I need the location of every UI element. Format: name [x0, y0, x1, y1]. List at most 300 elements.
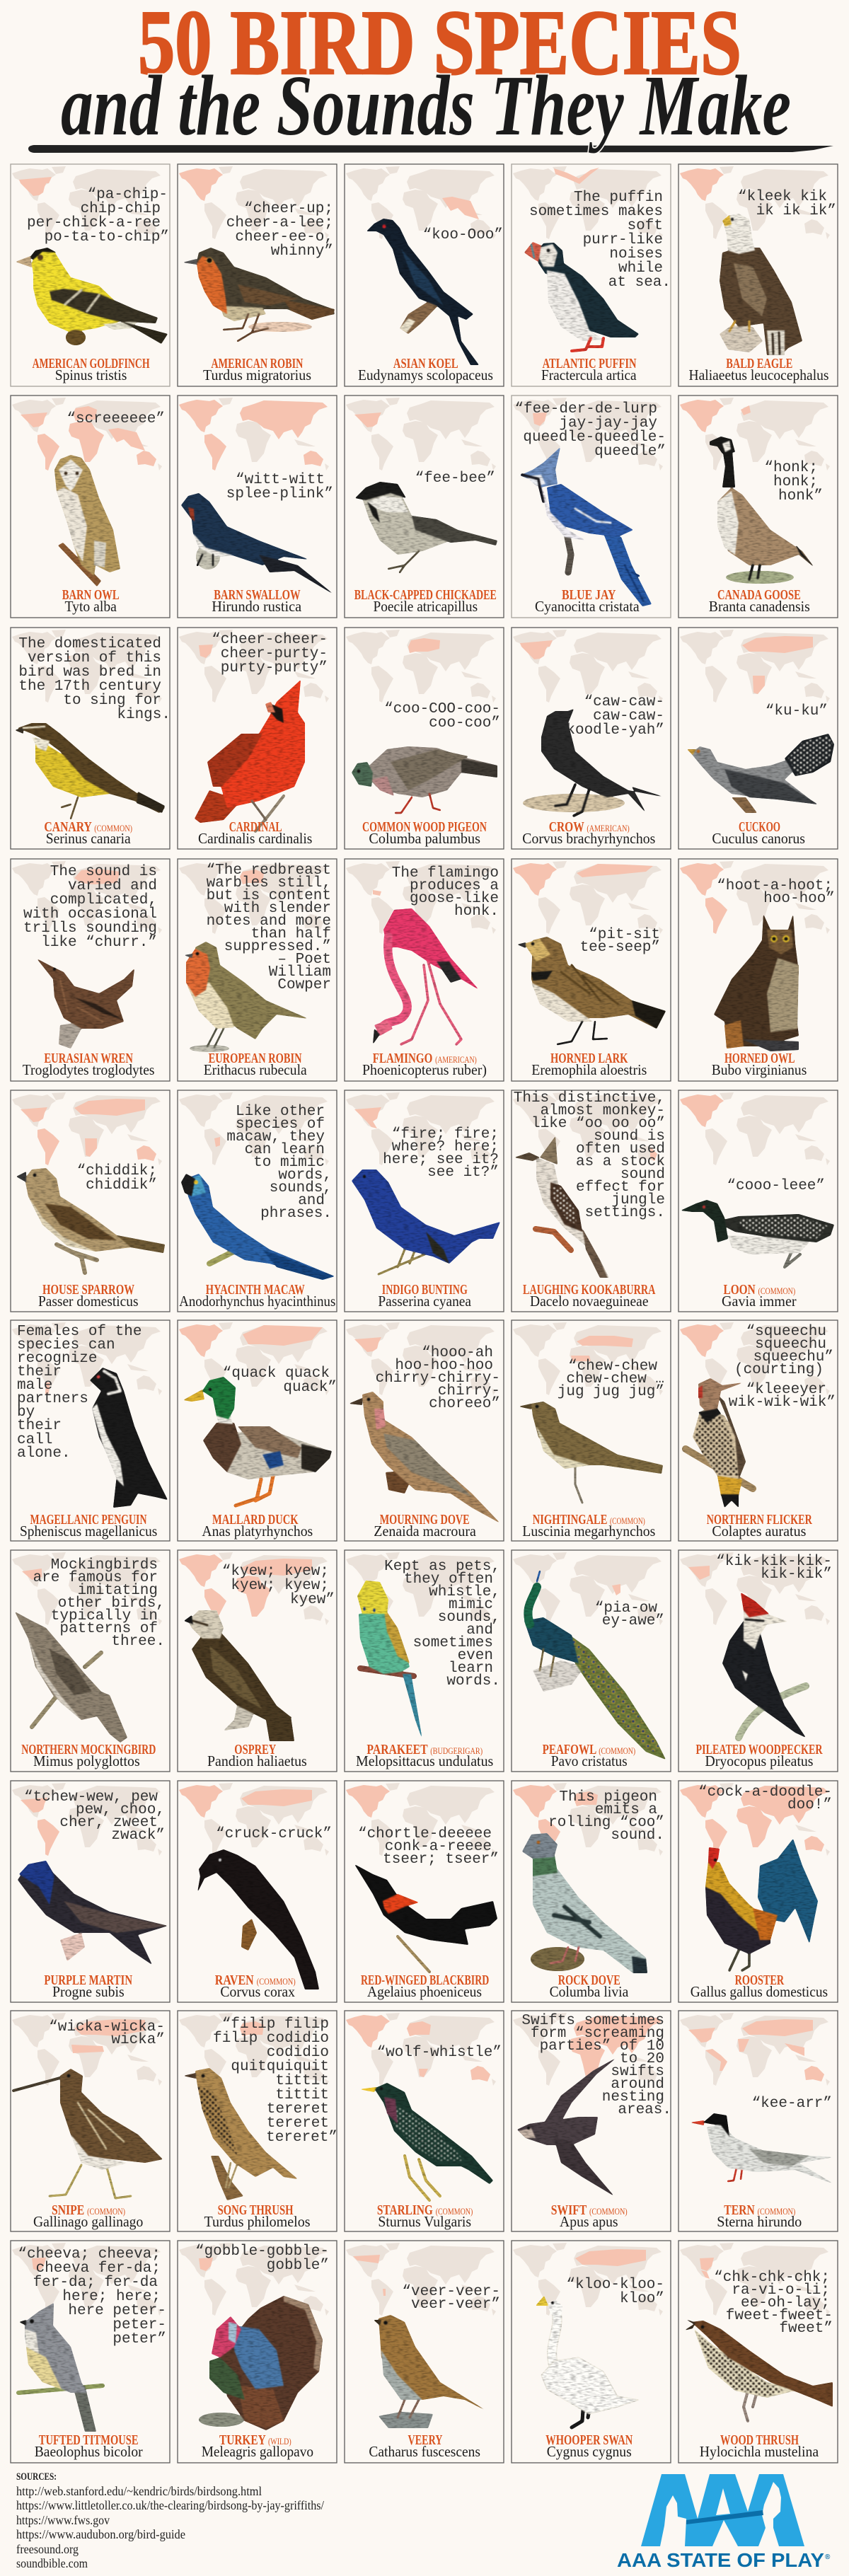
scientific name: Pavo cristatus [551, 1752, 628, 1769]
panel: Northern Mockingbird [11, 1550, 170, 1772]
quote: “chiddik; [77, 1163, 157, 1179]
quote: Mockingbirds [51, 1557, 158, 1573]
range map [179, 861, 329, 934]
bird illustration [517, 2057, 617, 2196]
name: MOURNING DOVE [380, 1512, 470, 1527]
bird illustration [366, 219, 479, 365]
quote: sound [620, 1167, 665, 1183]
range map [513, 1783, 663, 1856]
quote: imitating [78, 1583, 158, 1599]
range map [513, 861, 663, 934]
range map [12, 398, 162, 470]
range map [680, 398, 830, 470]
range map [179, 1092, 329, 1165]
quote: suppressed.” [224, 939, 331, 955]
panel: Horned Lark [512, 859, 671, 1081]
range map [346, 2013, 496, 2086]
quote: “squeechu [746, 1324, 826, 1340]
quote: kyew; kyew; [231, 1578, 329, 1594]
sources: https://www.audubon.org/bird-guide [16, 2527, 185, 2541]
quote: “honk; [764, 460, 818, 476]
quote: ey-awe” [602, 1613, 664, 1629]
panel: Horned Owl [678, 859, 838, 1081]
bird illustration [522, 1833, 647, 1973]
panel: Mourning Dove [345, 1320, 504, 1541]
quote: ee-oh-lay; [741, 2295, 830, 2311]
quote: “chk-chk-chk; [714, 2270, 830, 2286]
bird illustration [183, 1377, 332, 1506]
range map [179, 1322, 329, 1395]
panel: Northern Flicker [678, 1320, 838, 1541]
quote: wik-wik-wik” [729, 1394, 836, 1411]
panel: Nightingale [512, 1320, 671, 1541]
name: SNIPE (COMMON) [52, 2202, 125, 2218]
panel: Tern [678, 2011, 838, 2231]
quote: here; see it? [383, 1152, 499, 1168]
quote: “kleeeyer [746, 1382, 826, 1398]
name: TURKEY (WILD) [219, 2432, 291, 2448]
panel: Peafowl [512, 1550, 671, 1772]
quote: tereret [267, 2115, 329, 2132]
quote: “cruck-cruck” [216, 1826, 332, 1842]
quote: peter- [112, 2317, 166, 2333]
quote: sometimes makes [529, 204, 663, 220]
range map [179, 2243, 329, 2316]
panel: Crow [512, 628, 671, 849]
quote: call [17, 1432, 52, 1448]
name: RAVEN (COMMON) [215, 1973, 296, 1988]
quote: “fee-der-de-lurp [514, 401, 657, 417]
scientific name: Apus apus [560, 2213, 618, 2230]
bird illustration [54, 455, 120, 587]
name: TERN (COMMON) [724, 2202, 795, 2218]
name: COMMON WOOD PIGEON [362, 819, 487, 835]
panel: American Goldfinch [11, 164, 170, 386]
quote: “kyew; kyew; [222, 1564, 329, 1580]
quote: Like other [236, 1104, 325, 1120]
bird illustration [374, 2315, 490, 2428]
quote: gobble” [267, 2258, 329, 2274]
quote: “veer-veer- [402, 2284, 500, 2300]
quote: than half [251, 926, 331, 942]
scientific name: Agelaius phoeniceus [367, 1983, 482, 2000]
quote: their [17, 1364, 62, 1380]
quote: with slender [224, 901, 331, 917]
quote: whistle, [429, 1584, 500, 1600]
range map [680, 166, 830, 239]
quote: kings. [117, 707, 171, 723]
quote: “pia-ow [595, 1600, 657, 1617]
scientific name: Pandion haliaetus [207, 1752, 307, 1769]
scientific name: Anas platyrhynchos [202, 1523, 313, 1540]
bird illustration [536, 2296, 639, 2427]
quote: kyew” [290, 1592, 335, 1608]
scientific name: Anodorhynchus hyacinthinus [179, 1293, 335, 1310]
quote: ik ik ik” [756, 203, 836, 219]
name: HOUSE SPARROW [42, 1282, 134, 1298]
name: SONG THRUSH [218, 2202, 294, 2218]
quote: po-ta-to-chip” [45, 229, 169, 246]
scientific name: Poecile atricapillus [374, 598, 478, 615]
quote: notes and more [207, 913, 331, 930]
panel: Parakeet [345, 1550, 504, 1772]
quote: species of [236, 1116, 325, 1133]
quote: “fee-bee” [415, 470, 495, 487]
quote: “cheer-cheer- [212, 632, 328, 648]
name: LAUGHING KOOKABURRA [523, 1282, 656, 1298]
bird illustration [355, 482, 497, 572]
scientific name: Eremophila aloestris [531, 1061, 647, 1078]
panel: Veery [345, 2241, 504, 2463]
range map [12, 1322, 162, 1395]
panel: European Robin [178, 859, 337, 1081]
range map [179, 398, 329, 470]
quote: soft [628, 218, 663, 234]
panel: Eurasian Wren [11, 859, 170, 1081]
quote: jay-jay-jay [559, 415, 657, 432]
bird illustration [684, 2318, 833, 2421]
bird illustration [349, 1392, 500, 1523]
quote: “wicka-wicka- [49, 2019, 165, 2035]
quote: cheeva fer-da; [36, 2260, 161, 2277]
quote: here peter- [68, 2303, 166, 2319]
quote: varied and [68, 878, 157, 894]
quote: “ku-ku” [766, 703, 828, 720]
name: ROOSTER [735, 1973, 785, 1988]
quote: by [17, 1404, 35, 1421]
panel: House Sparrow [11, 1090, 170, 1312]
panel: Bald Eagle [678, 164, 838, 386]
quote: fer-da; fer-da [33, 2275, 158, 2291]
name: CROW (AMERICAN) [549, 819, 630, 835]
range map [346, 1552, 496, 1625]
quote: purty-purty” [221, 660, 328, 676]
quote: splee-plink” [226, 486, 333, 502]
quote: around [611, 2077, 664, 2093]
panel: Turkey [178, 2241, 337, 2463]
panel: Snipe [11, 2011, 170, 2231]
panel: Barn Owl [11, 395, 170, 618]
scientific name: Bubo virginianus [712, 1061, 807, 1078]
bird illustration [524, 242, 639, 351]
quote: with occasional [23, 906, 157, 923]
panel: Pileated Woodpecker [678, 1550, 838, 1772]
scientific name: Catharus fuscescens [369, 2443, 480, 2460]
panel: Rock Dove [512, 1781, 671, 2002]
range map [179, 2013, 329, 2086]
quote: zwack” [111, 1827, 165, 1844]
scientific name: Corvus corax [220, 1983, 295, 2000]
bird illustration [183, 2068, 298, 2200]
quote: quitquiquit [231, 2059, 329, 2075]
quote: “hooo-ah [422, 1345, 493, 1361]
range map [12, 861, 162, 934]
quote: “kleek kik [738, 189, 827, 205]
bird illustration [181, 1174, 335, 1280]
panel: Hyacinth Macaw [178, 1090, 337, 1312]
panel: Indigo Bunting [345, 1090, 504, 1312]
scientific name: Mimus polyglottos [33, 1752, 140, 1769]
name: PARAKEET (BUDGERIGAR) [366, 1742, 483, 1757]
quote: The puffin [574, 190, 663, 206]
name: HYACINTH MACAW [206, 1282, 305, 1298]
quote: effect for [576, 1179, 665, 1196]
scientific name: Erithacus rubecula [204, 1061, 307, 1078]
scientific name: Passer domesticus [38, 1293, 139, 1310]
name: EUROPEAN ROBIN [209, 1051, 302, 1066]
quote: and [298, 1193, 325, 1209]
bird illustration [15, 1612, 127, 1743]
bird illustration [90, 1368, 168, 1508]
quote: parties” of 10 [540, 2038, 664, 2055]
quote: “wolf-whistle” [377, 2045, 502, 2061]
name: MAGELLANIC PENGUIN [30, 1512, 147, 1527]
scientific name: Baeolophus bicolor [35, 2443, 143, 2460]
sources: https://www.littletoller.co.uk/the-clearing/birdsong-by-jay-griffiths/ [16, 2498, 324, 2512]
quote: chiddik” [86, 1177, 157, 1194]
quote: while [618, 260, 663, 277]
name: HORNED LARK [550, 1051, 628, 1066]
quote: The domesticated [18, 636, 161, 652]
quote: “pit-sit [589, 927, 660, 943]
range map [346, 2243, 496, 2316]
bird illustration [524, 1571, 666, 1760]
scientific name: Branta canadensis [709, 598, 810, 615]
quote: where? here; [392, 1139, 499, 1155]
quote: sometimes [413, 1635, 493, 1651]
panel: Loon [678, 1090, 838, 1312]
bird illustration [514, 1136, 609, 1278]
panel: Black-capped Chickadee [345, 395, 504, 618]
panel: Rooster [678, 1781, 838, 2002]
logo: AAA State of Play: ® [825, 2553, 831, 2561]
quote: like “oo oo oo” [531, 1116, 665, 1132]
bird illustration [523, 709, 666, 816]
quote: This distinctive, [514, 1090, 665, 1107]
range map [513, 1322, 663, 1395]
scientific name: Colaptes auratus [712, 1523, 806, 1540]
quote: “caw-caw- [584, 694, 664, 710]
quote: trills sounding [23, 920, 157, 937]
quote: “cheer-up; [244, 201, 333, 217]
quote: per-chick-a-ree [27, 215, 161, 231]
scientific name: Turdus philomelos [204, 2213, 310, 2230]
bird illustration [16, 1168, 165, 1273]
name: AMERICAN GOLDFINCH [33, 356, 150, 371]
scientific name: Melopsittacus undulatus [356, 1752, 493, 1769]
quote: typically in [51, 1608, 158, 1624]
quote: “witt-witt [236, 472, 325, 488]
name: BALD EAGLE [726, 356, 792, 371]
name: FLAMINGO (AMERICAN) [373, 1051, 477, 1066]
quote: honk” [778, 488, 823, 504]
quote: chirry- [438, 1383, 500, 1399]
bird illustration [199, 2296, 323, 2430]
name: ASIAN KOEL [393, 356, 458, 371]
panel: Barn Swallow [178, 395, 337, 618]
range map [12, 2243, 162, 2316]
bird illustration [354, 1864, 497, 1972]
sources: freesound.org [16, 2542, 79, 2556]
range map [12, 166, 162, 239]
quote: hoo-hoo-hoo [395, 1358, 493, 1374]
quote: often used [576, 1141, 665, 1157]
scientific name: Spheniscus magellanicus [20, 1523, 157, 1540]
name: BLUE JAY [562, 587, 616, 603]
name: WOOD THRUSH [720, 2432, 799, 2448]
quote: complicated, [50, 892, 157, 908]
name: NORTHERN MOCKINGBIRD [21, 1742, 156, 1757]
name: VEERY [408, 2432, 443, 2448]
scientific name: Gallus gallus domesticus [691, 1983, 828, 2000]
name: EURASIAN WREN [44, 1051, 133, 1066]
quote: “The redbreast [207, 862, 331, 879]
quote: the 17th century [18, 678, 161, 695]
quote: other birds, [58, 1595, 165, 1612]
quote: veer-veer” [411, 2297, 500, 2313]
scientific name: Passerina cyanea [378, 1293, 472, 1310]
quote: rolling “coo” [548, 1815, 664, 1831]
scientific name: Spinus tristis [55, 366, 127, 383]
panel: Asian Koel [345, 164, 504, 386]
bird illustration [519, 1402, 663, 1503]
name: SWIFT (COMMON) [551, 2202, 628, 2218]
range map [179, 1552, 329, 1625]
quote: “screeeeee” [67, 411, 165, 427]
quote: Cowper [277, 977, 331, 993]
scientific name: Cardinalis cardinalis [198, 830, 312, 847]
range map [346, 1783, 496, 1856]
sources: http://web.stanford.edu/~kendric/birds/birdsong.html [16, 2484, 262, 2498]
bird illustration [181, 493, 335, 595]
bird illustration [37, 959, 134, 1049]
quote: William [269, 964, 331, 981]
bird illustration [373, 908, 479, 1044]
scientific name: Troglodytes troglodytes [23, 1061, 154, 1078]
scientific name: Sterna hirundo [717, 2213, 802, 2230]
quote: pew, choo, [76, 1802, 165, 1818]
quote: recognize [17, 1351, 97, 1367]
bird illustration [184, 1610, 304, 1741]
quote: here; here; [62, 2289, 161, 2305]
range map [680, 1092, 830, 1165]
quote: learn [449, 1660, 493, 1677]
name: ROCK DOVE [558, 1973, 620, 1988]
range map [513, 166, 663, 239]
range map [680, 861, 830, 934]
quote: “kik-kik-kik- [716, 1554, 832, 1570]
bird illustration [195, 680, 305, 831]
quote: tee-seep” [580, 940, 660, 956]
sources: https://www.fws.gov [16, 2513, 110, 2527]
panel: Tufted Titmouse [11, 2241, 170, 2463]
range map [346, 1322, 496, 1395]
quote: cheer-ee-o, [235, 229, 333, 246]
quote: codidio [267, 2045, 329, 2061]
panel: Osprey [178, 1550, 337, 1772]
quote: “gobble-gobble- [195, 2243, 329, 2260]
quote: are famous for [33, 1570, 158, 1586]
name: ATLANTIC PUFFIN [543, 356, 637, 371]
quote: they often [404, 1571, 493, 1588]
range map [513, 2243, 663, 2316]
name: MALLARD DUCK [212, 1512, 299, 1527]
range map [179, 1783, 329, 1856]
range map [680, 2013, 830, 2086]
quote: see it?” [427, 1165, 499, 1181]
scientific name: Dryocopus pileatus [705, 1752, 814, 1769]
scientific name: Zenaida macroura [374, 1523, 477, 1540]
quote: sounds, [270, 1180, 332, 1196]
quote: Swifts sometimes [521, 2013, 664, 2029]
panel: Cardinal [178, 628, 337, 849]
range map [513, 1552, 663, 1625]
quote: chirry-chirry- [376, 1370, 500, 1387]
bird illustration [686, 1378, 753, 1508]
scientific name: Cuculus canorus [712, 830, 805, 847]
sources: SOURCES: [16, 2471, 57, 2483]
name: WHOOPER SWAN [545, 2432, 633, 2448]
quote: choreeo” [429, 1396, 500, 1412]
quote: “kee-arr” [752, 2096, 832, 2112]
range map [346, 166, 496, 239]
quote: fweet” [779, 2321, 833, 2337]
quote: tittit [275, 2087, 329, 2103]
quote: chip-chip [81, 201, 161, 217]
quote: queedle” [594, 444, 666, 460]
sources: soundbible.com [16, 2556, 88, 2570]
quote: wicka” [111, 2032, 165, 2048]
sources [16, 2471, 324, 2570]
bird illustration [722, 1593, 806, 1738]
quote: but is content [207, 888, 331, 904]
quote: “koo-Ooo” [423, 227, 503, 243]
name: CUCKOO [739, 819, 780, 835]
quote: to mimic [253, 1155, 325, 1171]
name: HORNED OWL [724, 1051, 795, 1066]
name: TUFTED TITMOUSE [39, 2432, 139, 2448]
panel: Canada Goose [678, 395, 838, 618]
name: AMERICAN ROBIN [211, 356, 304, 371]
quote: “cock-a-doodle- [698, 1784, 832, 1801]
bird illustration [16, 248, 168, 345]
panel: Raven [178, 1781, 337, 2002]
name: STARLING (COMMON) [377, 2202, 473, 2218]
bird illustration [352, 746, 497, 813]
quote: tereret [267, 2101, 329, 2118]
range map [513, 398, 663, 470]
scientific name: Cygnus cygnus [547, 2443, 632, 2460]
quote: as a stock [576, 1154, 665, 1170]
quote: “fire; fire; [392, 1126, 499, 1143]
quote: filip codidio [213, 2031, 329, 2047]
name: OSPREY [234, 1742, 277, 1757]
logo: AAA State of Play [617, 2474, 831, 2571]
quote: alone. [17, 1445, 71, 1462]
quote: kloo” [620, 2291, 664, 2307]
quote: conk-a-reeee [385, 1839, 492, 1855]
scientific name: Corvus brachyrhynchos [522, 830, 655, 847]
name: BLACK-CAPPED CHICKADEE [354, 587, 497, 603]
bird illustration [359, 2083, 493, 2200]
name: LOON (COMMON) [723, 1282, 795, 1298]
range map [179, 166, 329, 239]
quote: and [466, 1622, 493, 1639]
panel: Whooper Swan [512, 2241, 671, 2463]
range map [346, 398, 496, 470]
scientific name: Eudynamys scolopaceus [358, 366, 493, 383]
quote: jug jug jug” [558, 1384, 664, 1400]
